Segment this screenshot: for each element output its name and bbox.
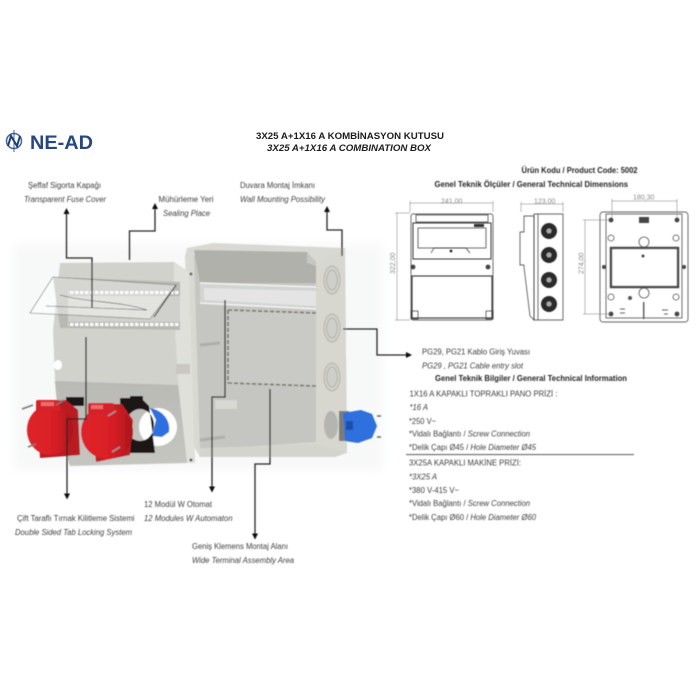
label: cable entry slot: PG29 , PG21 Cable entry slot xyxy=(422,362,524,370)
label: 12 modules xyxy=(144,500,233,523)
logo: NE-AD xyxy=(6,130,93,154)
label: tab locking system: Çift Taraflı Tırnak Kilitleme Sistemi xyxy=(17,514,135,523)
panel: box body with open interior xyxy=(185,243,347,457)
cable glands xyxy=(541,223,557,312)
spec list: 3X25 A socket: *Vidalı Bağlantı / Screw Connection xyxy=(409,499,531,508)
label: wall mounting xyxy=(240,181,326,204)
arrow: cable entry slot xyxy=(343,329,412,358)
technical information heading: Genel Teknik Bilgiler / General Technical Information xyxy=(435,374,627,383)
icon: blue socket on box side xyxy=(339,410,381,443)
cable knockouts xyxy=(324,266,340,391)
drawing: rear view xyxy=(578,194,688,322)
label: transparent fuse cover xyxy=(24,181,106,204)
fuse window xyxy=(53,277,180,330)
dimension: height 322,00: 322,00 xyxy=(390,252,397,274)
icon: blue socket through lid xyxy=(150,408,169,437)
spec list: 3X25 A socket xyxy=(409,458,537,522)
spec list: 1X16 A socket: *16 A xyxy=(410,403,428,412)
logo wordmark: NE-AD xyxy=(30,133,93,154)
arrow: tab locking system xyxy=(64,337,86,500)
label: tab locking system: Double Sided Tab Locking System xyxy=(15,528,132,537)
label: wall mounting: Duvara Montaj İmkanı xyxy=(240,181,315,190)
title: 3X25 A+1X16 A KOMBİNASYON KUTUSU xyxy=(256,131,444,141)
spec list: 3X25 A socket: 3X25A KAPAKLI MAKİNE PRİZİ: xyxy=(409,458,521,468)
arrow: terminal area xyxy=(252,389,270,540)
dimension: width 241,00: 241,00 xyxy=(441,198,463,206)
spec list: 1X16 A socket: 1X16 A KAPAKLI TOPRAKLI PANO PRİZİ : xyxy=(410,390,558,398)
dimensions heading: Genel Teknik Ölçüler / General Technical Dimensions xyxy=(434,180,629,189)
label: cable entry slot xyxy=(422,348,530,370)
spec list: 1X16 A socket xyxy=(409,390,558,452)
spec list: 3X25 A socket: *3X25 A xyxy=(409,472,437,482)
DIN rail xyxy=(200,283,316,309)
dimension: depth 123,00: 123,00 xyxy=(534,198,556,206)
label: tab locking system xyxy=(15,514,135,537)
arrow: transparent fuse cover xyxy=(64,208,92,308)
icon: red socket left xyxy=(22,400,80,458)
label: 12 modules: 12 Modül W Otomat xyxy=(144,500,213,509)
label: transparent fuse cover: Transparent Fuse Cover xyxy=(24,195,106,204)
spec list: 1X16 A socket: *250 V~ xyxy=(409,417,436,426)
arrow: 12 modules xyxy=(209,300,225,492)
spec list: 3X25 A socket: *380 V-415 V~ xyxy=(409,486,459,495)
lower lid shaded section xyxy=(55,381,187,466)
dimension: 274,00: 274,00 xyxy=(578,252,586,274)
product code: Ürün Kodu / Product Code: 5002 xyxy=(522,166,638,175)
product photo: open combination box xyxy=(15,166,688,565)
lid cut-out hole xyxy=(139,408,177,446)
arrow: wall mounting xyxy=(324,206,342,256)
spec list: 1X16 A socket: *Vidalı Bağlantı / Screw Connection xyxy=(409,430,531,438)
label: cable entry slot: PG29, PG21 Kablo Giriş Yuvası xyxy=(422,348,530,356)
title xyxy=(256,131,444,153)
label: terminal area: Geniş Klemens Montaj Alanı xyxy=(192,542,288,551)
transparent fuse cover xyxy=(30,277,176,319)
drawing: side view xyxy=(520,198,563,320)
label: terminal area xyxy=(192,542,295,565)
socket mounting plates xyxy=(66,396,155,453)
drawing: front view xyxy=(390,198,493,320)
dimension: 180,30: 180,30 xyxy=(633,194,655,202)
icon: red socket right xyxy=(81,403,133,462)
label: sealing place: Sealing Place xyxy=(163,209,211,218)
mounting plate cut-out xyxy=(611,248,678,287)
terminal mounting plate xyxy=(228,310,316,386)
arrow: sealing place xyxy=(130,203,158,260)
title: 3X25 A+1X16 A COMBINATION BOX xyxy=(267,143,432,153)
photo backdrop xyxy=(14,244,382,470)
spec list: 3X25 A socket: *Delik Çapı Ø60 / Hole Diameter Ø60 xyxy=(409,513,537,522)
label: sealing place xyxy=(158,195,214,218)
label: sealing place: Mühürleme Yeri xyxy=(158,195,214,204)
panel: hinged front lid xyxy=(30,262,195,466)
label: terminal area: Wide Terminal Assembly Area xyxy=(192,556,295,565)
box interior back wall xyxy=(194,252,316,450)
label: wall mounting: Wall Mounting Possibility xyxy=(240,195,326,204)
icon: logo emblem xyxy=(6,130,22,152)
spec list: 1X16 A socket: *Delik Çapı Ø45 / Hole Diameter Ø45 xyxy=(409,443,537,452)
label: 12 modules: 12 Modules W Automaton xyxy=(144,514,233,523)
label: transparent fuse cover: Şeffaf Sigorta Kapağı xyxy=(28,181,101,190)
